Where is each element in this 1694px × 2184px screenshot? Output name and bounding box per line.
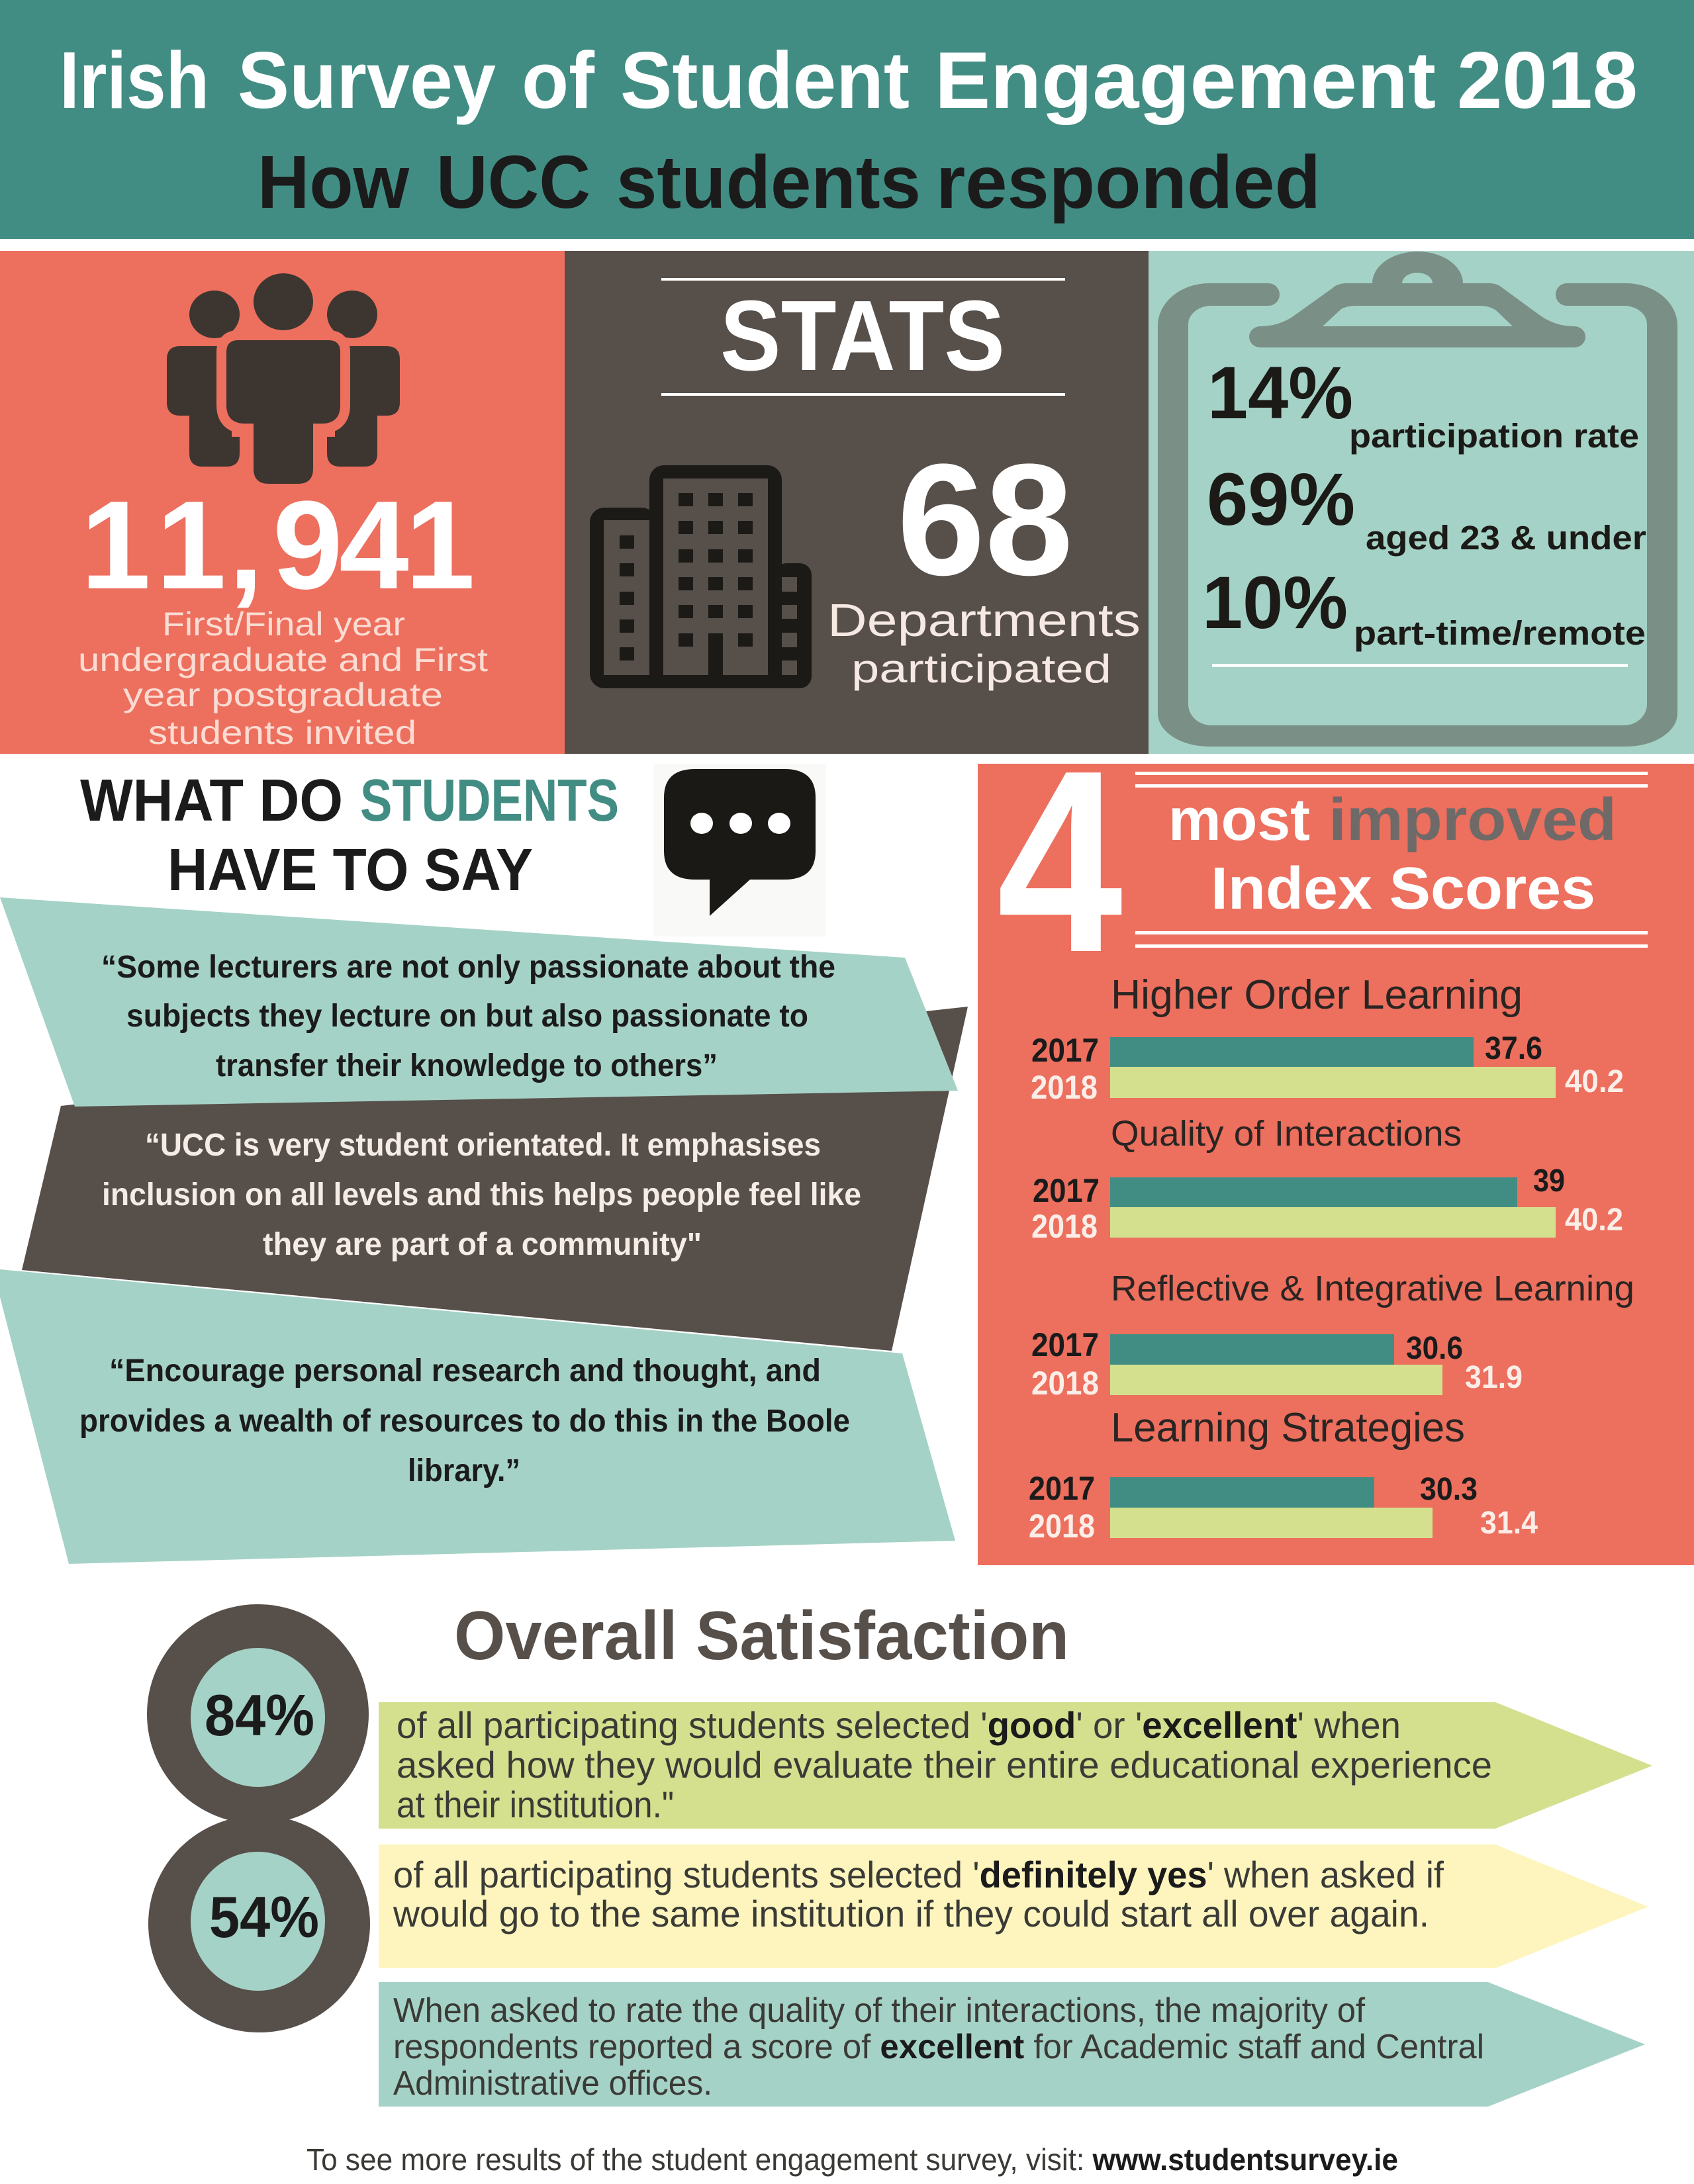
title: of bbox=[522, 35, 594, 125]
heading: STATS: STATS bbox=[720, 279, 1005, 391]
arrow: good or excellent: of all participating students selected 'good' or 'excellent' when bbox=[397, 1704, 1401, 1746]
number: 11,941: 11,941 bbox=[81, 475, 475, 615]
quote text 2: they are part of a community" bbox=[263, 1227, 702, 1262]
title: Irish bbox=[60, 35, 209, 125]
text: departments label: Departments bbox=[827, 594, 1141, 646]
subtitle bbox=[258, 140, 1321, 224]
chart: quality of interactions: Quality of Interactions bbox=[1111, 1114, 1462, 1154]
arrow: definitely yes: of all participating students selected 'definitely yes' when asked if bbox=[393, 1854, 1444, 1895]
chart: reflective and integrative learning bbox=[1031, 1269, 1634, 1402]
chart: higher order learning bbox=[1031, 972, 1624, 1106]
subtitle: UCC bbox=[436, 140, 590, 224]
chart: learning strategies: 31.4 bbox=[1480, 1506, 1538, 1541]
text: invited description: students invited bbox=[148, 714, 416, 751]
quote text 1: subjects they lecture on but also passionate to bbox=[126, 999, 808, 1034]
chart: quality of interactions: 40.2 bbox=[1565, 1203, 1623, 1238]
stat: 10% part-time/remote: 10% bbox=[1202, 561, 1348, 644]
subtitle: students bbox=[616, 140, 921, 224]
arrow: definitely yes bbox=[379, 1844, 1648, 1968]
callout: 84% ring: 84% bbox=[205, 1682, 314, 1748]
number: 4: 4 bbox=[997, 717, 1124, 1007]
arrow: good or excellent: at their institution." bbox=[397, 1784, 674, 1825]
text: invited description: First/Final year bbox=[162, 606, 405, 643]
title: Student bbox=[620, 35, 910, 125]
arrow: definitely yes: would go to the same institution if they could start all over again. bbox=[393, 1893, 1429, 1934]
heading: what do students have to say: HAVE TO SAY bbox=[167, 837, 533, 903]
icon: speech bubble bbox=[653, 764, 826, 936]
callout: 84% ring bbox=[147, 1604, 369, 1824]
quote text 3: library.” bbox=[408, 1453, 520, 1488]
title bbox=[60, 35, 1638, 125]
panel: students invited bbox=[0, 251, 565, 754]
arrow: quality of interactions: Administrative offices. bbox=[393, 2064, 712, 2103]
chart: reflective and integrative learning: 31.9 bbox=[1465, 1360, 1523, 1395]
panel: clipboard stats bbox=[1149, 251, 1694, 754]
callout: 54% ring: 54% bbox=[209, 1884, 319, 1950]
footer text: To see more results of the student engagement survey, visit: www.studentsurvey.ie bbox=[306, 2142, 1398, 2177]
chart: quality of interactions bbox=[1031, 1114, 1623, 1245]
chart: reflective and integrative learning: Reflective & Integrative Learning bbox=[1111, 1269, 1634, 1308]
quote banner: personal research bbox=[0, 1269, 955, 1564]
chart: quality of interactions: 2018 bbox=[1031, 1208, 1098, 1245]
stat: 14% participation rate: 14% bbox=[1207, 351, 1353, 434]
chart: quality of interactions: 2017 bbox=[1033, 1172, 1100, 1209]
stat: 10% part-time/remote bbox=[1202, 561, 1646, 652]
heading: overall satisfaction: Overall Satisfaction bbox=[454, 1598, 1069, 1674]
chart: learning strategies: Learning Strategies bbox=[1111, 1405, 1465, 1451]
quote text 2 bbox=[102, 1128, 861, 1262]
chart: higher order learning: 2017 bbox=[1031, 1032, 1099, 1069]
callout: 54% ring bbox=[148, 1815, 370, 2032]
chart: reflective and integrative learning: 2018 bbox=[1031, 1365, 1099, 1402]
chart: learning strategies bbox=[1029, 1405, 1538, 1545]
heading: most improved index scores: most bbox=[1168, 787, 1310, 853]
subtitle: responded bbox=[936, 140, 1321, 224]
number: 68: 68 bbox=[897, 431, 1073, 608]
arrow: good or excellent bbox=[379, 1702, 1652, 1829]
heading: what do students have to say bbox=[80, 768, 619, 903]
stat: 14% participation rate bbox=[1207, 351, 1639, 455]
chart: reflective and integrative learning: 2017 bbox=[1031, 1326, 1099, 1363]
quote banner: student oriented bbox=[22, 1007, 968, 1351]
chart: learning strategies: 30.3 bbox=[1420, 1472, 1478, 1507]
quote text 2: “UCC is very student orientated. It emphasises bbox=[145, 1128, 821, 1163]
heading: what do students have to say: STUDENTS bbox=[360, 768, 619, 834]
quote text 3: “Encourage personal research and thought, and bbox=[109, 1353, 821, 1388]
chart: higher order learning: 37.6 bbox=[1485, 1031, 1542, 1066]
title: Survey bbox=[238, 35, 496, 125]
stat: 69% aged 23 and under: 69% bbox=[1207, 458, 1355, 541]
panel: most improved index scores bbox=[978, 717, 1694, 1565]
title: 2018 bbox=[1457, 35, 1638, 125]
arrow: quality of interactions bbox=[379, 1982, 1645, 2107]
quote text 1 bbox=[101, 950, 835, 1083]
heading: most improved index scores: Index Scores bbox=[1211, 856, 1595, 922]
chart: higher order learning: 2018 bbox=[1031, 1069, 1098, 1106]
stat: 14% participation rate: participation rate bbox=[1349, 417, 1639, 455]
chart: learning strategies: 2018 bbox=[1029, 1508, 1095, 1545]
subtitle: How bbox=[258, 140, 410, 224]
icon: buildings bbox=[590, 465, 812, 688]
icon: group of people bbox=[167, 273, 400, 484]
stat: 10% part-time/remote: part-time/remote bbox=[1354, 614, 1646, 652]
icon: clipboard bbox=[1158, 251, 1677, 747]
chart: learning strategies: 2017 bbox=[1029, 1470, 1095, 1507]
heading: most improved index scores bbox=[1168, 787, 1617, 922]
arrow: quality of interactions: When asked to rate the quality of their interactions, the majority of bbox=[393, 1991, 1366, 2030]
quote text 2: inclusion on all levels and this helps people feel like bbox=[102, 1177, 861, 1212]
chart: quality of interactions: 39 bbox=[1533, 1163, 1565, 1199]
text: invited description: year postgraduate bbox=[123, 676, 443, 713]
chart: reflective and integrative learning: 30.6 bbox=[1406, 1331, 1463, 1366]
quote text 1: “Some lecturers are not only passionate about the bbox=[101, 950, 835, 985]
text: invited description bbox=[78, 606, 488, 751]
chart: higher order learning: Higher Order Learning bbox=[1111, 972, 1523, 1018]
quote text 3 bbox=[79, 1353, 850, 1488]
heading: what do students have to say: WHAT DO bbox=[80, 768, 343, 834]
stat: 69% aged 23 and under: aged 23 & under bbox=[1366, 519, 1646, 557]
quote text 3: provides a wealth of resources to do this in the Boole bbox=[79, 1404, 850, 1439]
header banner bbox=[0, 0, 1694, 239]
text: invited description: undergraduate and First bbox=[78, 641, 488, 678]
quote banner: passionate lecturers bbox=[0, 897, 958, 1107]
text: participated label: participated bbox=[851, 647, 1111, 691]
arrow: quality of interactions: respondents reported a score of excellent for Academic staff and Central bbox=[393, 2028, 1484, 2066]
stat: 69% aged 23 and under bbox=[1207, 458, 1646, 557]
arrow: good or excellent: asked how they would evaluate their entire educational experience bbox=[397, 1744, 1492, 1786]
chart: higher order learning: 40.2 bbox=[1565, 1064, 1624, 1099]
title: Engagement bbox=[935, 35, 1436, 125]
quote text 1: transfer their knowledge to others” bbox=[216, 1048, 718, 1083]
panel: stats bbox=[565, 251, 1149, 754]
heading: most improved index scores: improved bbox=[1329, 787, 1617, 853]
